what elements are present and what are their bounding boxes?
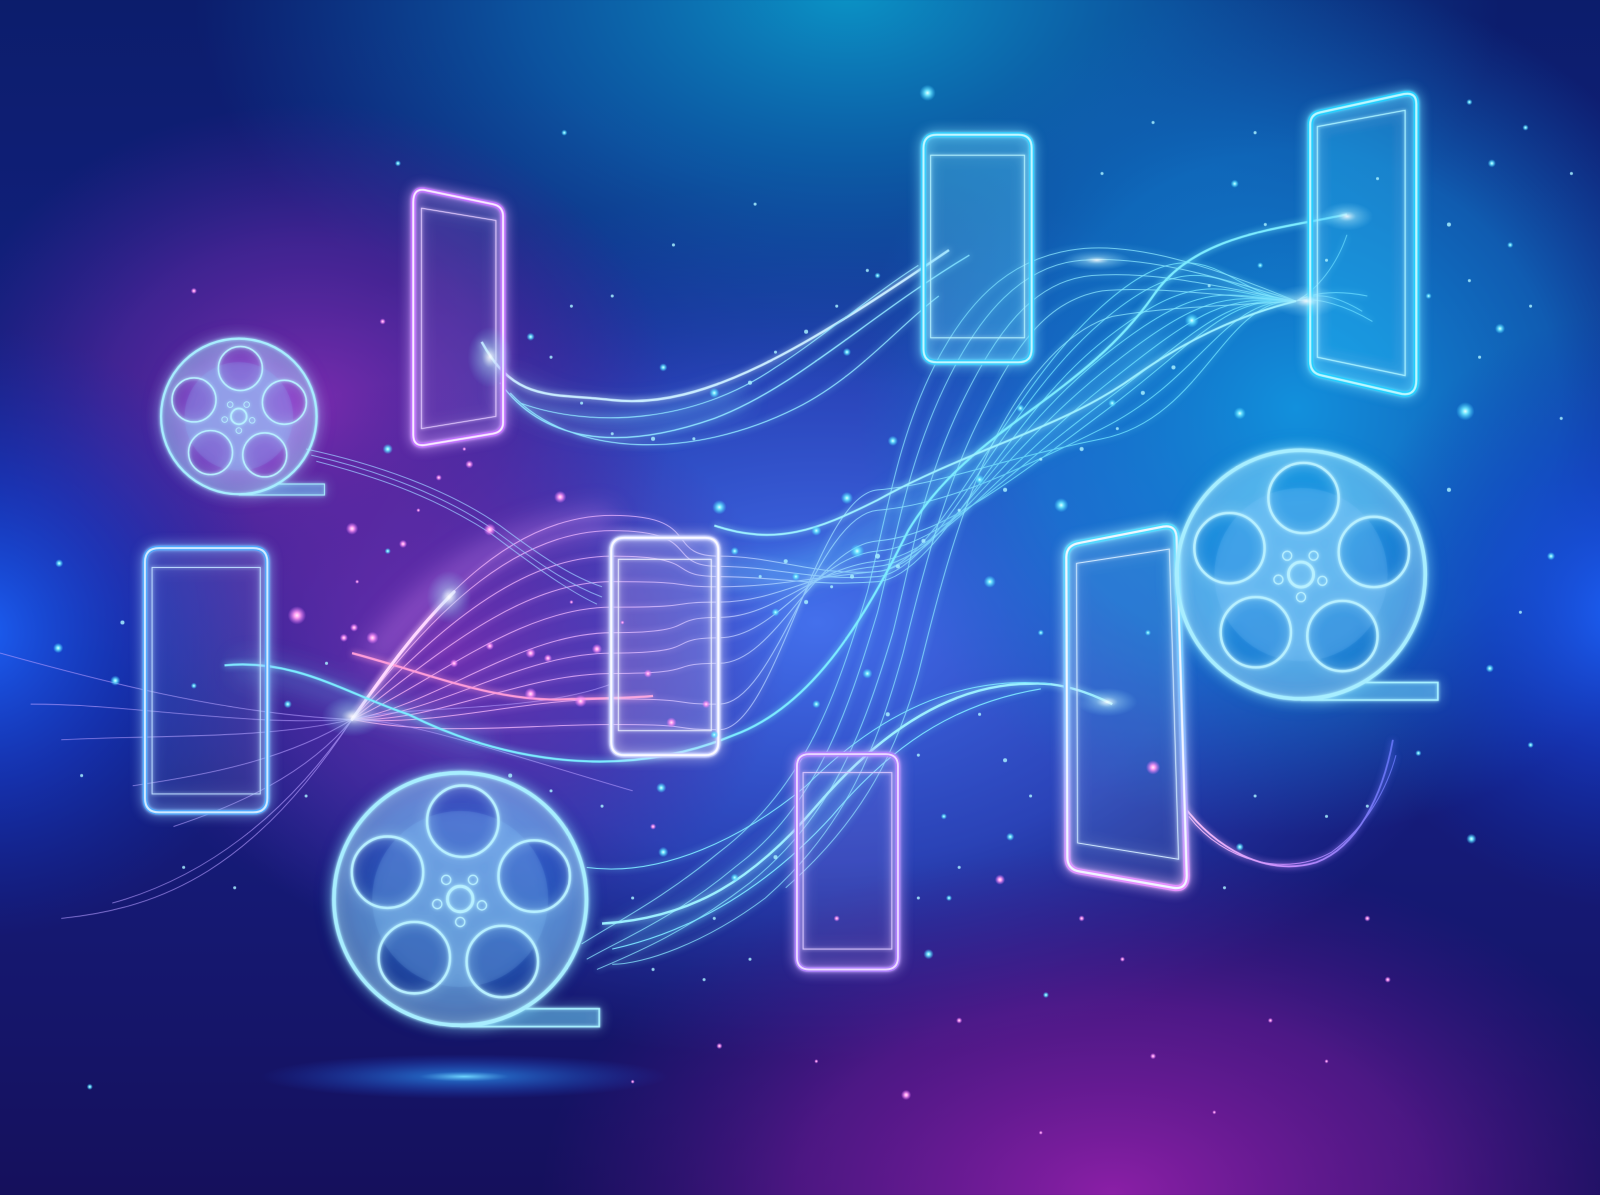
phone: left blue [145,548,267,812]
particles: pink sparkles [191,288,1391,1135]
phone: top left purple [413,190,503,445]
phone: center white lilac [611,538,718,755]
soft light bands behind the streams [167,345,1421,1019]
stream: cyan ribbon from left phone to top right phone [224,214,1347,761]
stream: waves from top right phone down to lower film reel [582,235,1372,969]
stream: reel top left lines to center phone [306,449,602,604]
phone: top center cyan [923,135,1032,362]
particles: fine cyan dust along streams [80,121,1573,981]
stream: pink ribbon to center phone [352,592,653,719]
stream: left fan lines [0,653,633,918]
stream: lower reel to tall right phone [587,682,1112,949]
light blooms on streams [321,202,1373,737]
stream: fan of light lines through center phone [352,263,1296,730]
film reel: right [1176,449,1438,700]
stream: purple tail from tall phone [1184,740,1396,866]
floor glow under film reel [260,1054,668,1099]
film reel: bottom left [333,771,599,1027]
phone: top right cyan [1310,94,1416,394]
phone: tall right gradient [1066,526,1187,888]
film reel: top left [160,338,324,495]
phone: bottom center purple [797,754,898,969]
particles: cyan sparkles [53,85,1555,1090]
stream: waves from top left phone to top center phone [482,250,969,445]
